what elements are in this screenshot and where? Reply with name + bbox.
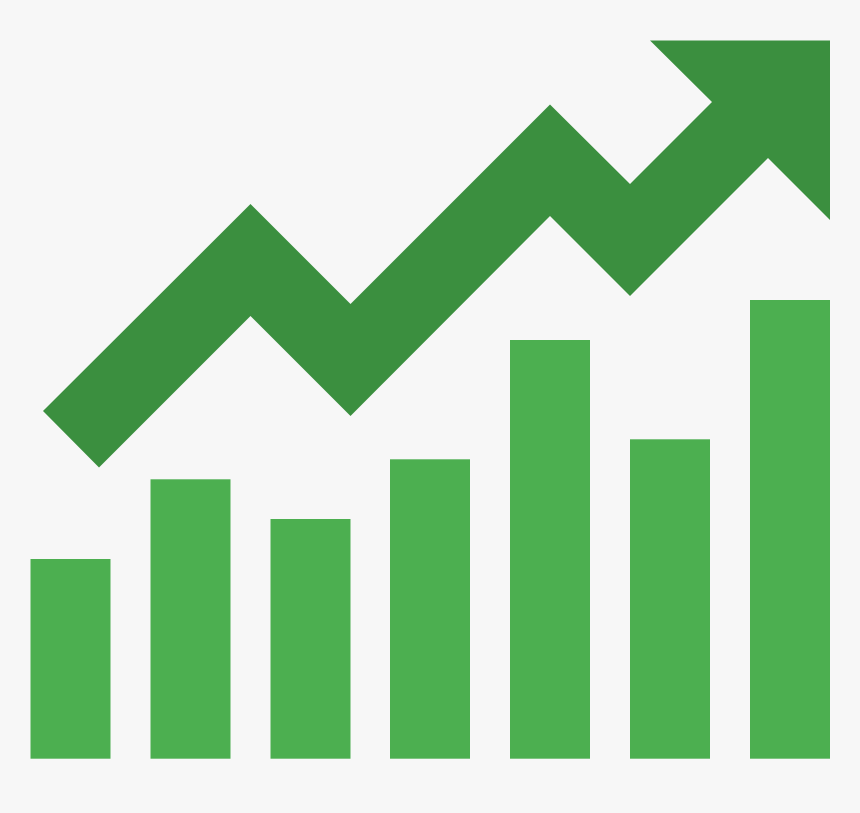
bar chart — [30, 300, 830, 759]
bar 7 — [750, 300, 830, 759]
bar 5 — [510, 340, 590, 759]
bar 2 — [150, 479, 230, 759]
bar 3 — [270, 519, 350, 759]
bar 1 — [30, 559, 110, 759]
bar 4 — [390, 459, 470, 759]
arrow: upward trend — [43, 40, 830, 468]
bar 6 — [630, 439, 710, 759]
